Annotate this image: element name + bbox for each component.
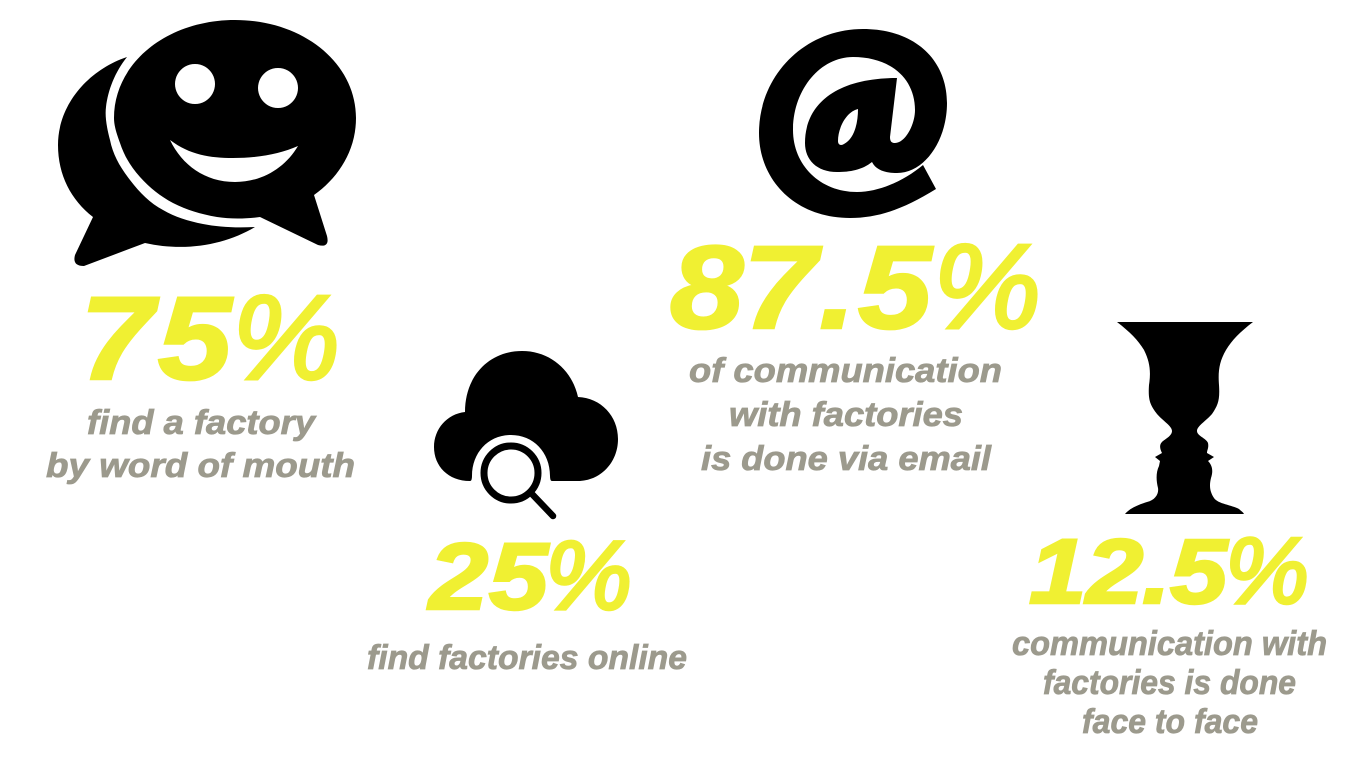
label: communication with factories is done face to face [1012,625,1327,741]
label: find a factory by word of mouth [46,404,355,485]
panel: email [670,29,1041,478]
label: find a factory by word of mouth: find a factory [87,404,317,442]
stat: 75%: 75 [80,273,234,404]
label: of communication with factories is done via email: with factories [729,396,963,434]
label: find factories online: find factories online [367,639,687,677]
label: communication with factories is done face to face: communication with [1012,625,1327,663]
stat: 25%: 25 [427,524,550,630]
stat: 12.5% [1029,518,1309,623]
label: find a factory by word of mouth: by word of mouth [46,447,355,485]
icon: cloud with magnifying glass [434,351,618,516]
icon: vase and two faces [1117,322,1253,514]
icon: smiling speech bubbles [58,20,356,266]
label: communication with factories is done face to face: factories is done [1043,664,1296,702]
stat: 87.5%: % [933,220,1041,354]
panel: online search [367,351,687,677]
stat: 12.5%: 12.5 [1029,520,1229,623]
stat: 25%: % [545,521,632,630]
stat: 25% [427,521,632,630]
label: communication with factories is done face to face: face to face [1082,703,1258,741]
stat: 75% [80,271,340,405]
label: of communication with factories is done via email: is done via email [701,440,993,478]
stat: 12.5%: % [1225,518,1309,623]
panel: face to face [1012,322,1327,741]
panel: word of mouth [46,20,356,485]
stat: 75%: % [232,271,340,405]
label: of communication with factories is done via email: of communication [689,352,1002,390]
label: of communication with factories is done via email [689,352,1002,478]
stat: 87.5%: 87.5 [670,222,934,353]
stat: 87.5% [670,220,1041,354]
icon: at sign [759,29,947,218]
